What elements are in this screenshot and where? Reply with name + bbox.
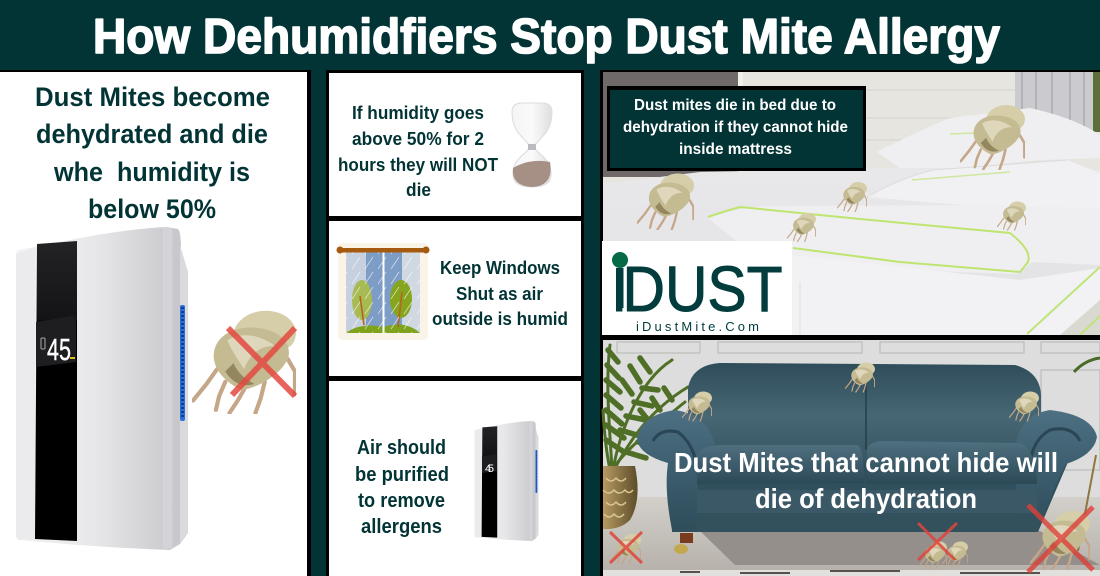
sofa scene	[603, 340, 1100, 576]
panel: bed photo	[600, 70, 1100, 340]
caption: cannot hide: Dust Mites that cannot hide will	[674, 447, 1058, 478]
text: humidity above 50%: die	[406, 179, 431, 200]
text: humidity above 50%	[338, 102, 499, 200]
heading text: whe humidity is	[53, 157, 250, 187]
dehumidifier small	[475, 421, 538, 541]
icon: window with rain	[336, 243, 430, 340]
dust mites on bed	[638, 105, 1026, 241]
icon: hourglass	[512, 103, 552, 187]
callout: die in bed: inside mattress	[679, 141, 792, 158]
crossed-out mites on floor	[610, 505, 1093, 572]
heading text	[35, 82, 270, 224]
text: air purified: to remove	[358, 490, 445, 512]
panel: humidity time	[326, 70, 584, 220]
text: keep windows shut: outside is humid	[432, 308, 568, 329]
text: air purified: be purified	[355, 464, 449, 486]
sofa body	[637, 363, 1097, 532]
caption: cannot hide: die of dehydration	[755, 483, 977, 514]
callout: die in bed: dehydration if they cannot hide	[623, 119, 848, 136]
dehumidifier large	[16, 227, 188, 550]
panel: sofa photo	[600, 335, 1100, 576]
text: air purified: Air should	[357, 437, 446, 459]
panel: keep windows shut	[326, 216, 584, 381]
bed scene	[603, 72, 1100, 335]
heading text: below 50%	[88, 194, 216, 224]
text: keep windows shut: Shut as air	[456, 283, 543, 304]
logo: iDUST	[602, 241, 792, 336]
text: humidity above 50%: hours they will NOT	[338, 154, 499, 175]
callout: die in bed: Dust mites die in bed due to	[634, 97, 836, 114]
text: humidity above 50%: If humidity goes	[352, 102, 484, 123]
text: keep windows shut	[432, 257, 568, 329]
plant	[603, 345, 688, 470]
title banner	[0, 0, 1100, 70]
pot	[603, 466, 638, 529]
logo: iDUST: DUST	[622, 253, 782, 325]
dehumidifier large: 45	[47, 332, 71, 367]
heading text: Dust Mites become	[35, 82, 270, 112]
logo: iDUST: iDustMite.Com	[636, 319, 759, 334]
logo: iDUST: i	[612, 253, 626, 325]
text: air purified: allergens	[361, 516, 442, 538]
dehumidifier small: 45	[485, 463, 494, 475]
caption: cannot hide	[674, 447, 1058, 514]
panel: purify air	[326, 376, 584, 576]
text: air purified	[355, 437, 449, 538]
text: humidity above 50%: above 50% for 2	[352, 128, 484, 149]
panel: dust mites dehydrate	[0, 70, 311, 576]
heading text: dehydrated and die	[36, 119, 268, 149]
callout: die in bed	[607, 86, 866, 171]
sofa foot	[674, 533, 693, 554]
text: keep windows shut: Keep Windows	[440, 257, 560, 278]
crossed-out dust mite	[193, 311, 296, 413]
title: How Dehumidfiers Stop Dust Mite Allergy	[93, 10, 1000, 64]
dust mites on sofa	[682, 363, 1039, 421]
